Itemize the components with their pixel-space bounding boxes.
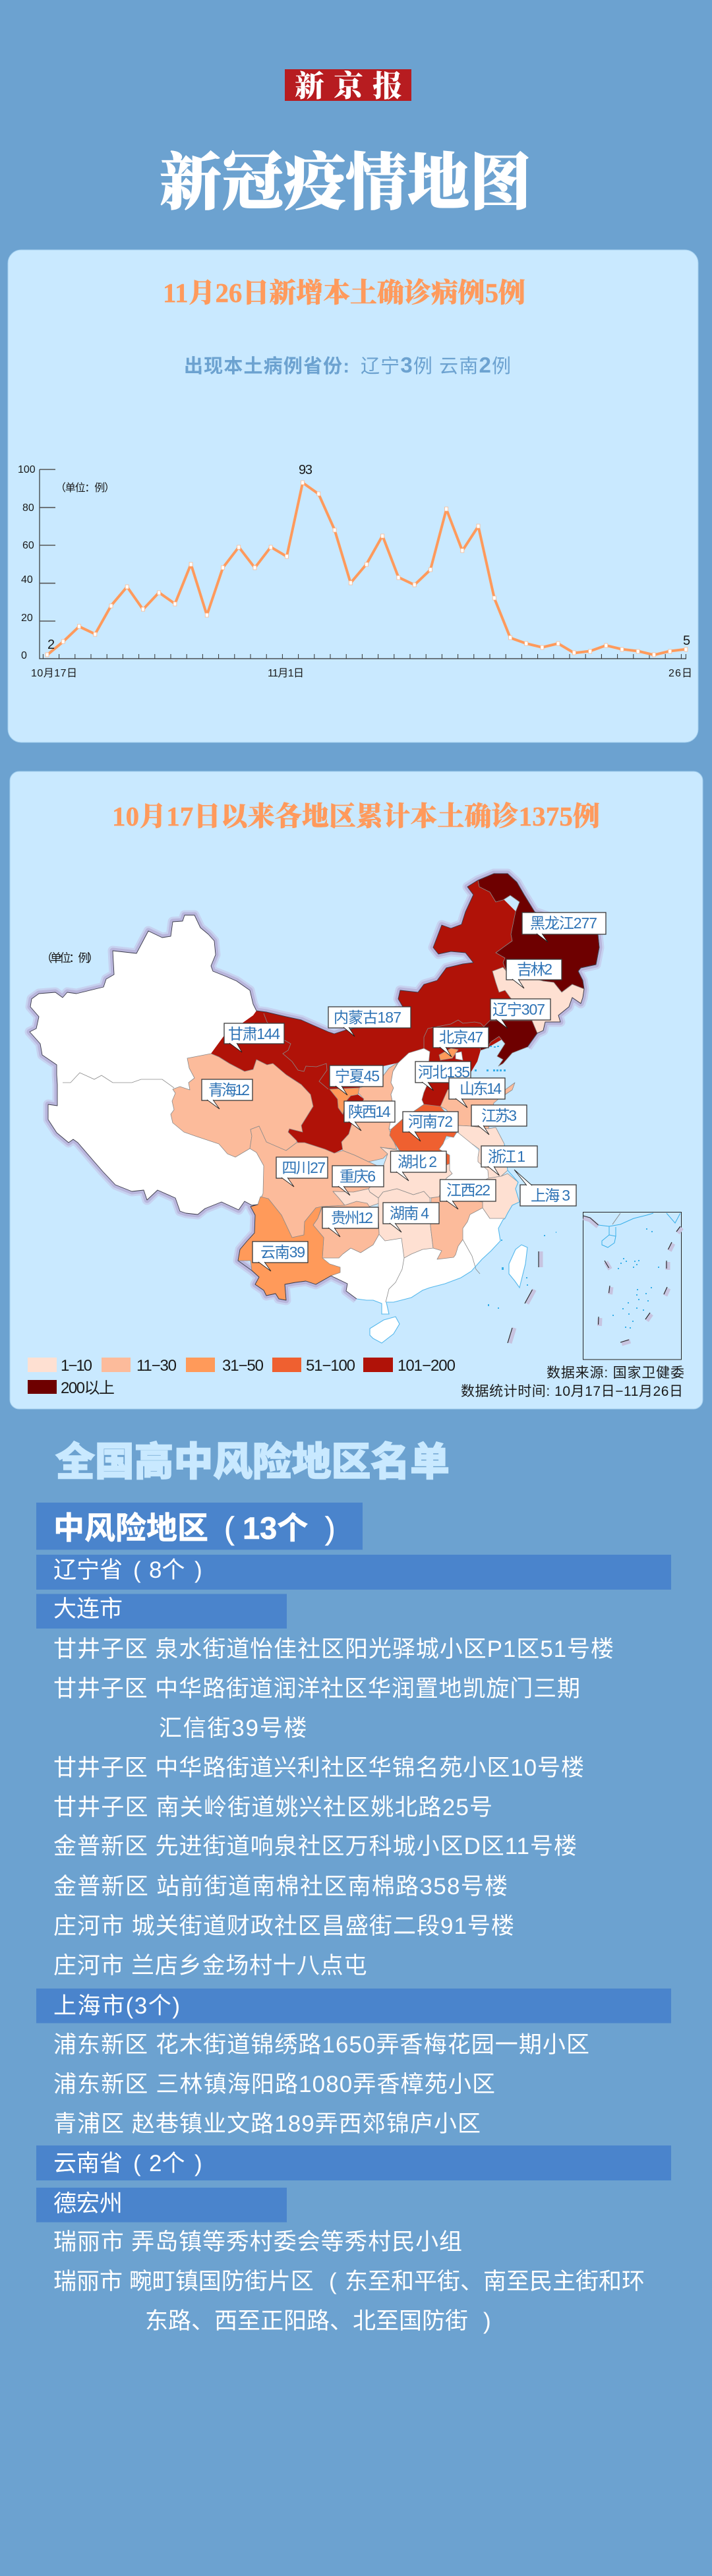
list: Shanghai areas: 浦东新区 三林镇海阳路1080弄香樟苑小区 (53, 2072, 495, 2097)
nine-dash line segments (508, 1251, 541, 1343)
bar: Liaoning (36, 1555, 671, 1590)
map unit note: （单位：例） (41, 951, 99, 965)
line chart: daily new cases: 11月1日 (268, 668, 304, 679)
land border line (30, 874, 599, 1300)
Henan (390, 1104, 458, 1165)
line chart: daily new cases: 2 (47, 638, 55, 652)
label: 河南72 (403, 1112, 458, 1141)
label: 陕西14: 陕西14 (348, 1103, 391, 1120)
coast line (357, 1144, 519, 1314)
bar: Yunnan: ) (194, 2151, 202, 2176)
label: 内蒙古187 (328, 1007, 411, 1036)
list: Dalian areas: 甘井子区 中华路街道润洋社区华润置地凯旋门三期 (53, 1676, 580, 1702)
line chart: daily new cases: 0 (21, 650, 27, 661)
label: 上海 3: 上海 3 (531, 1187, 570, 1204)
label: 江西22: 江西22 (446, 1182, 490, 1199)
heading: daily new cases: 11月26日新增本土确诊病例5例 (163, 278, 525, 308)
Shanxi (389, 1048, 430, 1129)
list: Yunnan areas: ) (483, 2308, 491, 2334)
label: 山东14: 山东14 (460, 1080, 502, 1097)
label: 江苏3: 江苏3 (481, 1107, 517, 1124)
label: 湖北 2 (390, 1151, 446, 1181)
legend: 101−200 (398, 1357, 456, 1375)
legend: 1−10 (61, 1357, 92, 1375)
title: 新冠疫情地图 (160, 149, 531, 218)
bar: Dehong: 德宏州 (53, 2191, 123, 2217)
label: 湖南 4 (383, 1203, 439, 1232)
label: 黑龙江277 (522, 913, 606, 942)
Shaanxi (341, 1063, 398, 1162)
label: 浙江 1: 浙江 1 (488, 1148, 525, 1165)
bar: Dalian: 大连市 (53, 1596, 123, 1622)
subheading: provinces: 出现本土病例省份: (184, 355, 349, 377)
line chart: daily new cases: 100 (18, 464, 36, 475)
label: 山东14 (449, 1078, 505, 1108)
data source note: 数据来源: 国家卫健委 (547, 1365, 684, 1381)
Beijing (439, 1048, 458, 1060)
subheading: provinces: 辽宁3例 云南2例 (361, 353, 511, 377)
Jiangsu (458, 1125, 508, 1178)
label: 青海12: 青海12 (208, 1081, 250, 1098)
logo: 新京报: 新京报 (295, 69, 402, 103)
bar: Shanghai (36, 1989, 671, 2023)
label: 甘肃144 (224, 1023, 284, 1052)
line chart: daily new cases: 5 (683, 634, 690, 648)
list: Dalian areas: 甘井子区 中华路街道兴利社区华锦名苑小区10号楼 (53, 1755, 584, 1781)
south-east base region (322, 1133, 512, 1314)
label: 云南39: 云南39 (260, 1243, 305, 1261)
section header: medium risk areas: ( (224, 1511, 235, 1545)
list: Yunnan areas: ( (329, 2269, 337, 2294)
section header: medium risk areas: ) (325, 1511, 336, 1545)
line chart: daily new cases: 80 (22, 502, 34, 514)
label: 重庆6: 重庆6 (340, 1168, 376, 1185)
label: 河北135: 河北135 (418, 1063, 470, 1081)
map of China (30, 874, 599, 1343)
legend (28, 1357, 456, 1397)
list: Yunnan areas: 瑞丽市 弄岛镇等秀村委会等秀村民小组 (53, 2229, 462, 2255)
label: 贵州12 (322, 1207, 378, 1237)
Sichuan (250, 1126, 377, 1238)
label: 北京47 (433, 1027, 489, 1057)
label: 上海 3 (514, 1170, 576, 1206)
north red region: Inner Mongolia, Gansu, Hebei (211, 880, 532, 1153)
Jiangxi (430, 1197, 483, 1259)
Ningxia (330, 1088, 359, 1114)
line chart: daily new cases: 40 (21, 574, 33, 585)
line chart: daily new cases: （单位：例） (55, 482, 115, 494)
heading: cumulative cases: 10月17日以来各地区累计本土确诊1375例 (112, 801, 600, 831)
list: Shanghai areas: 青浦区 赵巷镇业文路189弄西郊锦庐小区 (53, 2111, 481, 2137)
Shandong (440, 1081, 515, 1129)
line chart: daily new cases: 60 (22, 540, 34, 551)
bar: Liaoning: 8个 (149, 1557, 185, 1583)
Hubei (369, 1147, 452, 1198)
label: 浙江 1 (481, 1146, 537, 1176)
bar: Yunnan: 云南省 (53, 2151, 123, 2176)
label: 内蒙古187: 内蒙古187 (334, 1009, 401, 1026)
heading: risk list: 全国高中风险地区名单 (55, 1440, 450, 1484)
Taiwan (509, 1245, 527, 1288)
data source note: 数据统计时间: 10月17日−11月26日 (461, 1384, 683, 1399)
inset map: South China Sea (583, 1212, 682, 1360)
list: Yunnan areas (53, 2229, 645, 2334)
label: 四川27: 四川27 (282, 1159, 326, 1176)
label: 重庆6 (332, 1166, 384, 1195)
Guizhou (313, 1201, 379, 1258)
label: 黑龙江277: 黑龙江277 (530, 914, 597, 932)
list: Dalian areas: 甘井子区 南关岭街道姚兴社区姚北路25号 (53, 1795, 492, 1820)
bar: Liaoning: ) (194, 1557, 202, 1583)
bar: Yunnan (36, 2145, 671, 2180)
label: 甘肃144: 甘肃144 (228, 1025, 280, 1042)
list: Dalian areas: 庄河市 兰店乡金场村十八点屯 (53, 1953, 367, 1979)
label: 湖南 4: 湖南 4 (390, 1205, 429, 1222)
label: 河北135 (415, 1062, 471, 1091)
panel: cumulative map (10, 771, 703, 1409)
label: 宁夏45: 宁夏45 (335, 1067, 380, 1085)
label: 河南72: 河南72 (408, 1113, 453, 1130)
Yunnan (238, 1197, 340, 1300)
bar: Yunnan: ( (133, 2151, 141, 2176)
label: 陕西14 (344, 1101, 395, 1131)
subheading: provinces (184, 353, 511, 377)
list: Dalian areas: 庄河市 城关街道财政社区昌盛街二段91号楼 (53, 1913, 514, 1939)
Tianjin (456, 1052, 463, 1060)
Hunan (378, 1189, 433, 1258)
section header: medium risk areas: 中风险地区 (53, 1511, 208, 1545)
list: Dalian areas: 金普新区 先进街道响泉社区万科城小区D区11号楼 (53, 1834, 577, 1859)
bar: Shanghai: 上海市(3个) (53, 1993, 180, 2019)
data markers (45, 481, 688, 657)
list: Yunnan areas: 东路、西至正阳路、北至国防街 (145, 2308, 468, 2334)
border halo (30, 874, 599, 1300)
section header: medium risk areas (36, 1503, 363, 1549)
line chart: daily new cases: 93 (299, 463, 312, 477)
list: Dalian areas: 金普新区 站前街道南棉社区南棉路358号楼 (53, 1874, 508, 1900)
bar: Dalian (36, 1594, 287, 1629)
label: 贵州12: 贵州12 (331, 1209, 373, 1226)
label: 云南39 (252, 1242, 308, 1271)
legend: 51−100 (306, 1357, 355, 1375)
line chart: daily new cases: 26日 (668, 668, 692, 679)
list: Dalian areas: 汇信街39号楼 (159, 1716, 307, 1741)
bar: Yunnan: 2个 (149, 2151, 185, 2176)
label: 江苏3 (471, 1105, 527, 1135)
panel: daily new cases (8, 250, 698, 742)
label: 辽宁307: 辽宁307 (492, 1001, 545, 1018)
legend: 11−30 (136, 1357, 177, 1375)
line chart: daily new cases: 10月17日 (31, 668, 77, 679)
list: Dalian areas (53, 1636, 614, 1979)
bar: Dehong (36, 2188, 287, 2222)
line chart: daily new cases: 20 (21, 613, 33, 624)
list: Yunnan areas: 瑞丽市 畹町镇国防街片区 (53, 2269, 314, 2294)
bar: Liaoning: 辽宁省 (53, 1557, 123, 1583)
line chart: daily new cases (18, 463, 692, 679)
Zhejiang (483, 1174, 519, 1218)
Chongqing (333, 1189, 379, 1207)
Liaoning (478, 1021, 537, 1066)
Xinjiang and Tibet (30, 915, 264, 1214)
Jilin (492, 967, 584, 1033)
data source note (461, 1365, 684, 1399)
bar: Liaoning: ( (133, 1557, 141, 1583)
Hainan (370, 1317, 400, 1343)
label: 吉林2 (506, 959, 562, 988)
Heilongjiang (478, 874, 599, 992)
province lines in north (264, 1013, 328, 1089)
list: Yunnan areas: 东至和平街、南至民主街和环 (345, 2269, 645, 2294)
label: 青海12 (202, 1079, 252, 1109)
label: 辽宁307 (490, 999, 550, 1029)
label: 湖北 2: 湖北 2 (398, 1153, 437, 1170)
list: Shanghai areas (53, 2032, 589, 2137)
label: 吉林2: 吉林2 (517, 961, 552, 978)
section header: medium risk areas: 13个 (243, 1511, 308, 1545)
chart axes (40, 469, 686, 659)
legend: 31−50 (222, 1357, 264, 1375)
islands (475, 1046, 556, 1309)
label: 宁夏45 (330, 1065, 383, 1095)
list: Dalian areas: 甘井子区 泉水街道怡佳社区阳光驿城小区P1区51号楼 (53, 1636, 614, 1662)
Qinghai (171, 1054, 313, 1157)
data line (47, 483, 686, 655)
list: Shanghai areas: 浦东新区 花木街道锦绣路1650弄香梅花园一期小区 (53, 2032, 589, 2058)
label: 江西22 (440, 1180, 496, 1209)
label: 四川27 (276, 1157, 328, 1187)
legend: 200以上 (61, 1379, 115, 1397)
label: 北京47: 北京47 (439, 1029, 483, 1046)
